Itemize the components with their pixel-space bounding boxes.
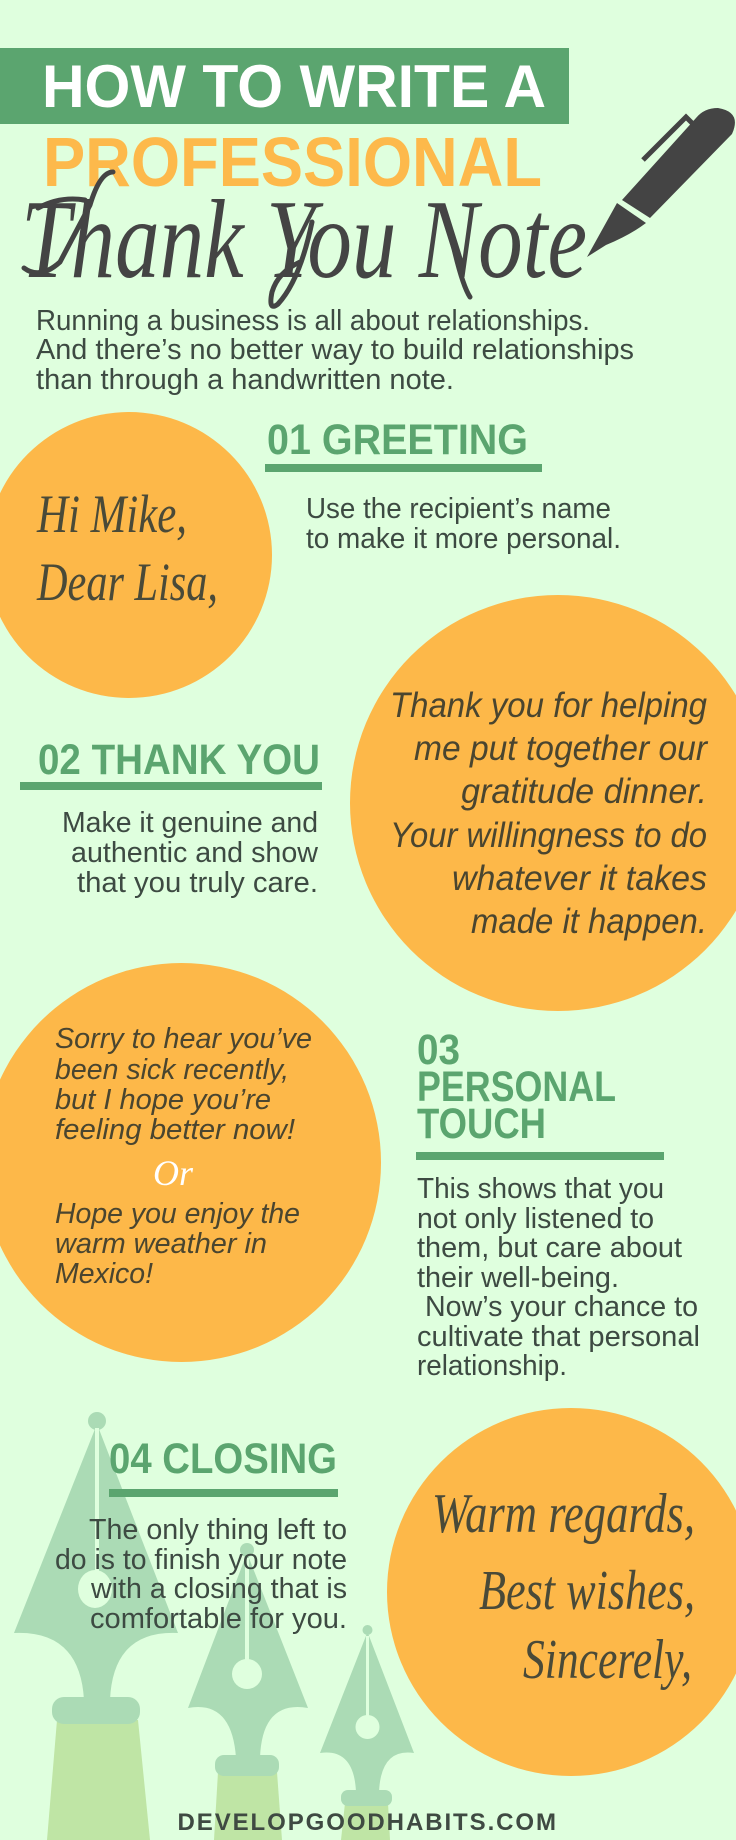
panel: personal touch example circle: Sorry to hear you’ve (55, 1023, 312, 1055)
text: closing description: do is to finish your note (55, 1544, 347, 1576)
panel: personal touch example circle: feeling better now! (55, 1114, 295, 1146)
text: personal touch description: This shows that you (417, 1173, 664, 1205)
intro paragraph: Running a business is all about relationships. (36, 305, 590, 337)
text: closing description: The only thing left to (89, 1514, 347, 1546)
text: personal touch description: not only listened to (417, 1203, 654, 1235)
text: personal touch description (417, 1173, 700, 1382)
text: personal touch description: relationship. (417, 1350, 567, 1382)
text: thank you description: Make it genuine and (62, 807, 318, 839)
text: closing description: comfortable for you. (90, 1603, 347, 1635)
heading: 03 personal touch: TOUCH (417, 1100, 546, 1148)
text: greeting description: to make it more personal. (306, 523, 621, 555)
heading: 03 personal touch (417, 1026, 616, 1148)
intro paragraph: than through a handwritten note. (36, 364, 454, 396)
text: personal touch description: their well-being. (417, 1262, 619, 1294)
icon: medium nib (188, 1543, 308, 1840)
text: personal touch description: Now’s your chance to (425, 1291, 698, 1323)
panel: thank you example circle: Thank you for helping (390, 686, 707, 725)
panel: thank you example circle: Your willingness to do (390, 816, 707, 855)
text: greeting description: Use the recipient’s name (306, 493, 611, 525)
panel: thank you example circle (350, 595, 736, 1011)
panel: 04 closing (55, 1435, 347, 1635)
title banner (0, 48, 569, 124)
panel: greeting example circle (0, 412, 272, 698)
heading: 04 closing: 04 CLOSING (109, 1435, 337, 1483)
text: greeting description (306, 493, 621, 555)
panel: personal touch example circle: been sick recently, (55, 1054, 289, 1086)
title line: professional: PROFESSIONAL (43, 123, 542, 201)
icon: pen (587, 108, 735, 257)
text: or: Or (153, 1153, 194, 1193)
title line: how to write a: HOW TO WRITE A (42, 53, 546, 120)
heading: 02 thank you: 02 THANK YOU (38, 736, 320, 784)
panel: thank you example circle: me put together our (414, 729, 708, 768)
text: thank you description: authentic and show (71, 837, 319, 869)
panel: greeting example circle: Dear Lisa, (36, 552, 218, 612)
panel: 02 thank you (20, 736, 322, 899)
decoration: calligraphic swashes on the title (24, 172, 470, 306)
panel: personal touch example circle: but I hope you’re (55, 1084, 271, 1116)
text: personal touch description: them, but care about (417, 1232, 682, 1264)
intro paragraph (36, 305, 634, 396)
heading: 01 greeting: 01 GREETING (267, 416, 528, 464)
intro paragraph: And there’s no better way to build relationships (36, 334, 634, 366)
footer: website: DEVELOPGOODHABITS.COM (178, 1809, 556, 1836)
panel: closing example circle (387, 1408, 736, 1776)
panel: 03 personal touch (416, 1026, 700, 1382)
panel: greeting example circle: Hi Mike, (36, 484, 187, 544)
panel: personal touch example circle: Mexico! (55, 1258, 153, 1290)
text: closing description: with a closing that is (90, 1573, 347, 1605)
text: personal touch description: cultivate that personal (417, 1321, 700, 1353)
panel: thank you example circle: made it happen. (471, 902, 707, 941)
panel: 01 greeting (265, 416, 621, 555)
heading: 03 personal touch: 03 (417, 1026, 460, 1074)
illustration: fountain pen nibs (14, 1412, 414, 1840)
heading: 03 personal touch: PERSONAL (417, 1063, 616, 1111)
panel: personal touch example circle (0, 963, 381, 1362)
text: thank you description (62, 807, 319, 899)
text: closing description (55, 1514, 347, 1635)
icon: small nib (320, 1625, 414, 1840)
panel: thank you example circle: whatever it takes (452, 859, 707, 898)
icon: large nib (14, 1412, 178, 1840)
title line: thank you note: Thank You Note (21, 178, 587, 302)
panel: thank you example circle: gratitude dinner. (461, 772, 707, 811)
panel: personal touch example circle: warm weather in (55, 1228, 267, 1260)
text: thank you description: that you truly care. (77, 867, 318, 899)
panel: personal touch example circle: Hope you enjoy the (55, 1198, 300, 1230)
panel: closing example circle: Sincerely, (523, 1629, 692, 1691)
